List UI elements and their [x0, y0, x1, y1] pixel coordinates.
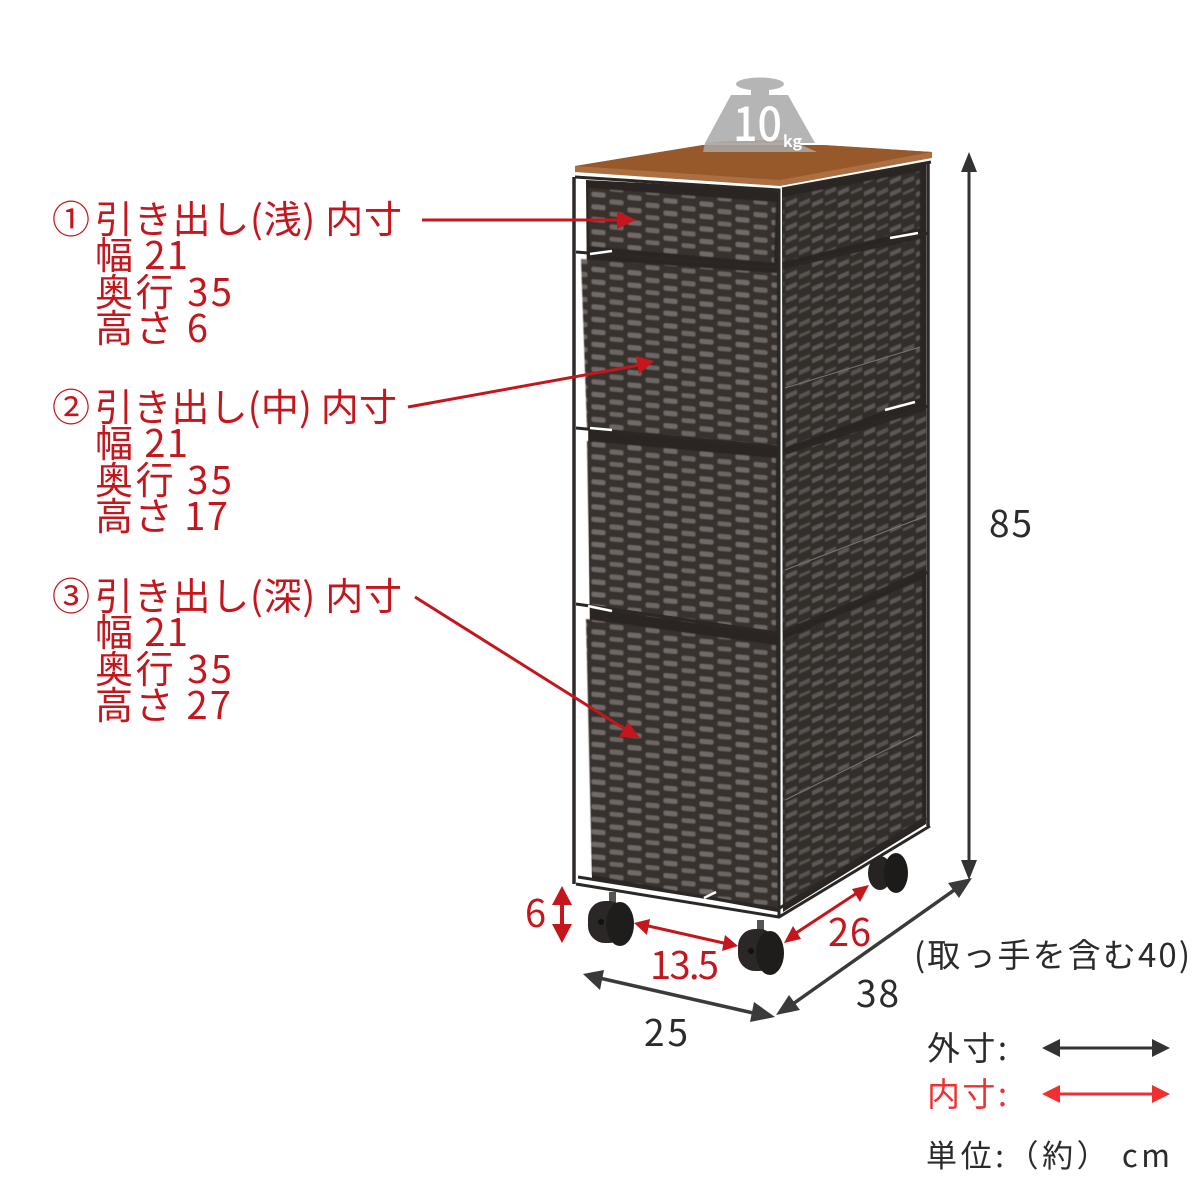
heading: drawer 1 dimensions: 高さ 6 [95, 298, 208, 353]
label: 38: 38 [856, 964, 899, 1018]
arrow: drawer 2 pointer [408, 356, 654, 407]
legend: outer dimensions [927, 1022, 1170, 1070]
arrow: width 25 [583, 970, 775, 1022]
heading: drawer 3 dimensions: 幅 21 [95, 602, 188, 657]
drawer 1 [588, 171, 920, 263]
heading: drawer 3 dimensions: ③ [52, 566, 90, 621]
caster: back right [868, 853, 908, 893]
heading: drawer 1 dimensions [52, 189, 402, 353]
heading: drawer 2 dimensions [52, 377, 397, 541]
heading: drawer 2 dimensions: ② [52, 377, 90, 432]
metal frame [575, 162, 931, 917]
back frame [574, 163, 928, 884]
heading: drawer 2 dimensions: 高さ 17 [95, 486, 228, 541]
label: 6: 6 [525, 883, 546, 938]
unit note: 単位:（約） cm [926, 1131, 1170, 1176]
wooden top [575, 145, 932, 186]
arrow: drawer 1 pointer [422, 211, 636, 229]
drawer 3 [587, 410, 926, 634]
label: 25: 25 [644, 1003, 688, 1057]
arrow: inner depth 26 [784, 885, 869, 943]
label: 13.5: 13.5 [650, 935, 719, 990]
legend: outer dimensions: 外寸: [927, 1022, 1007, 1070]
heading: drawer 3 dimensions: 奥行 35 [95, 639, 232, 694]
label: 26: 26 [828, 902, 871, 957]
note: with handle 40: (取っ手を含む40) [914, 929, 1190, 977]
heading: drawer 1 dimensions: 奥行 35 [95, 262, 232, 317]
heading: drawer 3 dimensions: 引き出し(深) 内寸 [95, 566, 402, 621]
label: 85: 85 [989, 494, 1032, 548]
dark cabinet backing [586, 164, 926, 912]
heading: drawer 2 dimensions: 引き出し(中) 内寸 [95, 377, 397, 432]
heading: drawer 1 dimensions: 引き出し(浅) 内寸 [95, 189, 402, 244]
arrow: height 85 [961, 152, 977, 880]
icon: 10kg weight: kg [783, 128, 802, 152]
heading: drawer 2 dimensions: 奥行 35 [95, 450, 232, 505]
icon: 10kg weight: 10 [733, 86, 782, 155]
illustration: wicker drawer cart [574, 145, 932, 975]
heading: drawer 3 dimensions: 高さ 27 [95, 675, 231, 730]
heading: drawer 3 dimensions [52, 566, 402, 730]
legend: inner dimensions: 内寸: [927, 1068, 1007, 1116]
caster: front left [588, 892, 634, 946]
arrow: depth 38 [776, 878, 972, 1015]
caster: front right [738, 920, 784, 975]
arrow: drawer 3 pointer [415, 597, 640, 738]
heading: drawer 2 dimensions: 幅 21 [95, 413, 188, 468]
arrow: caster height 6 [552, 886, 572, 943]
legend: inner dimensions [927, 1068, 1170, 1116]
white highlights [588, 233, 918, 898]
heading: drawer 1 dimensions: 幅 21 [95, 225, 188, 280]
icon: 10kg weight [703, 78, 817, 155]
drawer 2 [581, 239, 920, 448]
heading: drawer 1 dimensions: ① [52, 189, 90, 244]
drawer 4 [586, 579, 922, 910]
arrow: inner width 13.5 [634, 919, 738, 951]
